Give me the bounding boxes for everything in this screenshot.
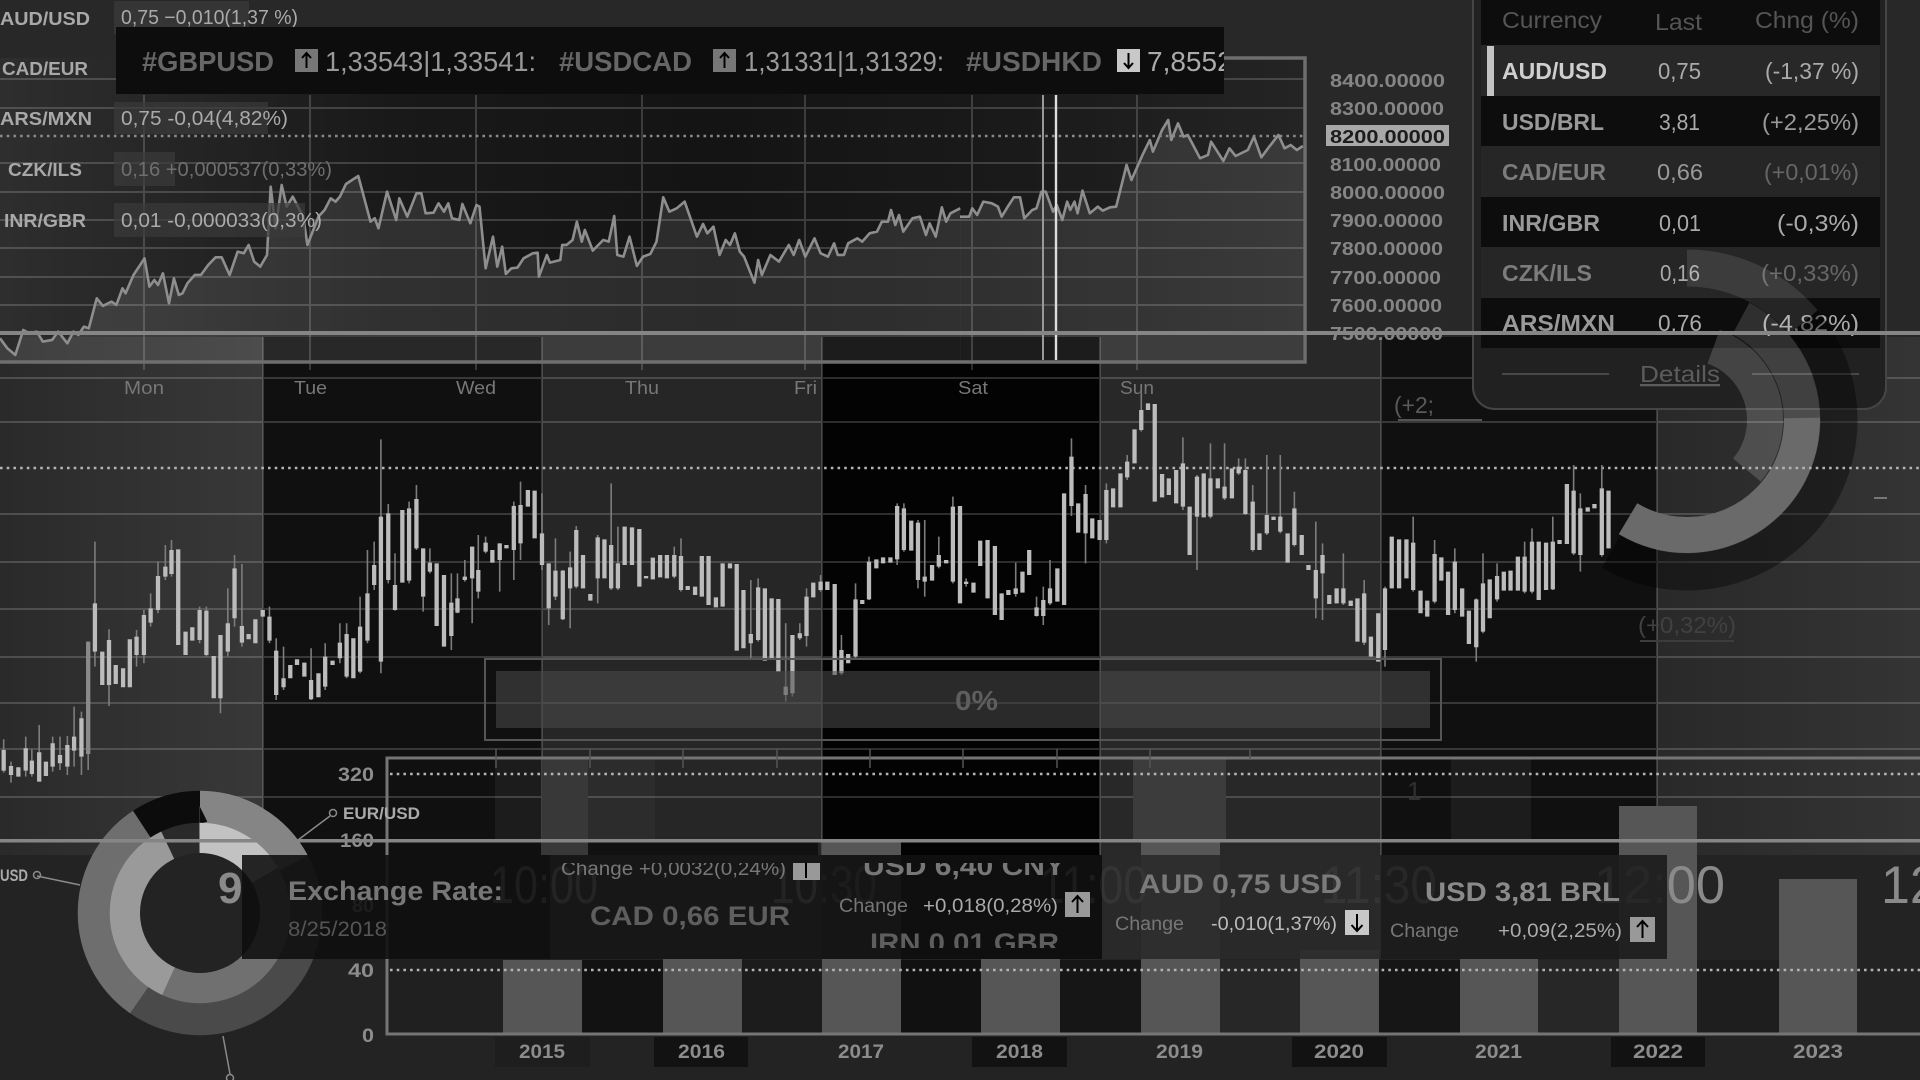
donut labels: EUR/USD — [343, 804, 420, 823]
row CZK/ILS: (+0,33%) — [1761, 260, 1859, 286]
exchange rate heading: 8/25/2018 — [288, 918, 387, 941]
CZK/ILS row: 0,16 +0,000537(0,33%) — [121, 159, 332, 181]
card: USD/CAD scrolling — [562, 863, 1060, 948]
donut chart bottom left: 9 — [218, 864, 242, 913]
day axis labels: Tue — [294, 378, 327, 398]
donut labels — [0, 804, 420, 885]
row CZK/ILS: CZK/ILS — [1502, 260, 1592, 286]
AUD/USD row: AUD/USD — [0, 9, 90, 29]
price axis labels: 7900.00000 — [1330, 211, 1443, 231]
price axis labels: 7600.00000 — [1330, 296, 1442, 316]
ticker bar: #GBPUSD — [142, 46, 274, 77]
year labels: 2019 — [1156, 1042, 1203, 1063]
table header: Last — [1655, 9, 1703, 35]
day axis labels: Fri — [794, 378, 817, 398]
year labels: 2018 — [996, 1042, 1043, 1063]
row INR/GBR: (-0,3%) — [1777, 210, 1859, 236]
card: AUD/USD: -0,010(1,37%) — [1211, 914, 1337, 935]
row ARS/MXN: 0,76 — [1658, 310, 1702, 336]
row USD/BRL — [1481, 96, 1880, 146]
CZK/ILS row — [8, 152, 332, 186]
row INR/GBR: 0,01 — [1659, 210, 1701, 236]
row AUD/USD: AUD/USD — [1502, 58, 1607, 84]
time axis labels: 10:00 — [490, 856, 598, 915]
price axis labels — [1326, 71, 1449, 344]
card: USD/BRL: Change — [1390, 921, 1459, 942]
ticker bar: 1,33543|1,33541: — [325, 46, 536, 77]
card: USD/CNY change: +0,018(0,28%) — [923, 896, 1058, 917]
row AUD/USD: (-1,37 %) — [1765, 58, 1859, 84]
row AUD/USD: 0,75 — [1658, 58, 1701, 84]
day axis labels: Sat — [958, 378, 988, 398]
row USD/BRL: 3,81 — [1659, 109, 1700, 135]
line chart box frame and cursor lines — [0, 58, 1305, 362]
time axis labels: 11:00 — [1040, 856, 1148, 915]
candles left half — [4, 439, 953, 783]
area and line left part — [0, 176, 960, 362]
card: USD/CAD scrolling: USD 6,40 CNY — [863, 851, 1065, 881]
card: USD/CAD scrolling: IRN 0,01 GBR — [870, 928, 1059, 958]
AUD/USD row: 0,75 −0,010(1,37 %) — [121, 7, 298, 29]
row CZK/ILS — [1481, 247, 1880, 298]
row AUD/USD — [1481, 45, 1880, 96]
row USD/BRL: USD/BRL — [1502, 109, 1604, 135]
row CAD/EUR — [1481, 146, 1880, 197]
ticker bar: #USDCAD — [559, 46, 692, 77]
ticker bar — [116, 27, 1233, 94]
ticker bar: 1,31331|1,31329: — [744, 46, 944, 77]
row USD/BRL: (+2,25%) — [1762, 109, 1859, 135]
outer ring — [94, 807, 306, 1019]
price axis labels: 8000.00000 — [1330, 183, 1445, 203]
row ARS/MXN: (-4,82%) — [1762, 310, 1859, 336]
panel: vertical session bands — [0, 337, 1920, 1080]
panel: line chart plot area — [0, 58, 1305, 333]
year labels: 2023 — [1793, 1042, 1843, 1063]
price axis labels: 7500.00000 — [1330, 324, 1443, 344]
panel: currency table — [1473, 0, 1886, 409]
thick horizontal rules — [0, 331, 1920, 842]
time axis labels — [490, 856, 1920, 915]
price axis labels: 7700.00000 — [1330, 268, 1441, 288]
row CAD/EUR: 0,66 — [1657, 159, 1703, 185]
card: USD/CAD scrolling: CAD 0,66 EUR — [590, 901, 790, 931]
row ARS/MXN — [1481, 298, 1880, 348]
year labels: 2021 — [1475, 1042, 1522, 1063]
INR/GBR row — [4, 203, 322, 237]
card: USD/BRL — [1390, 877, 1655, 942]
candlestick chart — [4, 393, 1609, 783]
card: USD/CNY change: Change — [839, 896, 908, 917]
card: AUD/USD — [1115, 869, 1369, 935]
row CAD/EUR: (+0,01%) — [1764, 159, 1859, 185]
table header: Currency — [1502, 7, 1603, 33]
card: USD/BRL: USD 3,81 BRL — [1425, 877, 1620, 907]
details link: Details — [1640, 361, 1720, 387]
day axis labels — [124, 378, 1154, 398]
axis labels: 40 — [348, 961, 374, 982]
time axis labels: 12:00 — [1594, 856, 1725, 915]
line chart: weekly price — [0, 120, 1303, 362]
year labels: 2020 — [1314, 1042, 1364, 1063]
donut chart bottom left — [0, 804, 420, 1080]
progress bar: 0% — [955, 685, 998, 716]
area and line right part — [960, 120, 1303, 362]
faded change labels: (+0,32%) — [1638, 612, 1736, 638]
axis labels: 160 — [340, 831, 374, 852]
time axis labels: 11:30 — [1321, 856, 1437, 915]
faded change labels — [1394, 392, 1887, 806]
exchange rate heading: Exchange Rate: — [288, 876, 503, 906]
card: USD/BRL: +0,09(2,25%) — [1498, 921, 1622, 942]
ARS/MXN row: ARS/MXN — [0, 109, 92, 129]
radial gauge top right — [1535, 268, 1839, 572]
row CZK/ILS: 0,16 — [1660, 260, 1700, 286]
year labels: 2016 — [678, 1042, 725, 1063]
donut labels: USD — [0, 866, 28, 885]
table header: Chng (%) — [1755, 7, 1859, 33]
CZK/ILS row: CZK/ILS — [8, 160, 82, 180]
faded change labels: 1 — [1407, 776, 1421, 806]
price axis labels: 8200.00000 — [1330, 127, 1445, 147]
dotted reference lines — [0, 136, 1920, 970]
time axis labels: 10:30 — [771, 856, 877, 915]
price axis labels: 8400.00000 — [1330, 71, 1445, 91]
faded change labels: (+2; — [1394, 392, 1434, 418]
upper column blocks — [495, 758, 1531, 855]
bars — [503, 806, 1857, 1034]
exchange rate heading — [288, 876, 503, 941]
price axis labels: 7800.00000 — [1330, 239, 1443, 259]
grid lines — [0, 79, 1920, 855]
axis labels: 320 — [338, 765, 374, 786]
panel: rate card backgrounds — [242, 855, 1667, 959]
row ARS/MXN: ARS/MXN — [1502, 310, 1615, 336]
INR/GBR row: INR/GBR — [4, 211, 86, 231]
year labels: 2015 — [519, 1042, 565, 1063]
card: USD/CAD scrolling: Change +0,0032(0,24%) — [561, 859, 786, 880]
ARS/MXN row — [0, 102, 288, 134]
ARS/MXN row: 0,75 -0,04(4,82%) — [121, 108, 288, 130]
row INR/GBR: INR/GBR — [1502, 210, 1600, 236]
candles right half — [960, 393, 1609, 667]
price axis labels: 8300.00000 — [1330, 99, 1444, 119]
day axis labels: Wed — [456, 378, 496, 398]
tick marks under progress — [496, 749, 1250, 768]
day axis labels: Sun — [1120, 378, 1154, 398]
row CAD/EUR: CAD/EUR — [1502, 159, 1606, 185]
year labels: 2022 — [1633, 1042, 1683, 1063]
inner ring — [125, 838, 275, 988]
axis labels: 80 — [352, 896, 374, 917]
row INR/GBR — [1481, 197, 1880, 247]
ticker bar: #USDHKD — [966, 46, 1102, 77]
day axis labels: Mon — [124, 378, 164, 398]
CAD/EUR row: CAD/EUR — [2, 59, 88, 79]
ticker bar: 7,8552 — [1147, 46, 1233, 77]
year labels — [495, 1037, 1843, 1067]
chart frame — [387, 758, 1920, 1034]
card: USD/CNY change — [839, 892, 1090, 917]
axis labels: 0 — [362, 1026, 374, 1047]
bar chart — [338, 758, 1920, 1067]
day axis labels: Thu — [625, 378, 659, 398]
table header — [1481, 0, 1880, 45]
currency list left — [0, 1, 332, 237]
INR/GBR row: 0,01 -0,000033(0,3%) — [121, 210, 322, 232]
donut annotation lines — [34, 810, 336, 1080]
axis labels — [338, 765, 374, 1047]
progress bar — [485, 659, 1441, 740]
price axis labels: 8100.00000 — [1330, 155, 1441, 175]
AUD/USD row — [0, 1, 298, 34]
year labels: 2017 — [838, 1042, 884, 1063]
card: AUD/USD: Change — [1115, 914, 1184, 935]
card: AUD/USD: AUD 0,75 USD — [1139, 869, 1342, 899]
